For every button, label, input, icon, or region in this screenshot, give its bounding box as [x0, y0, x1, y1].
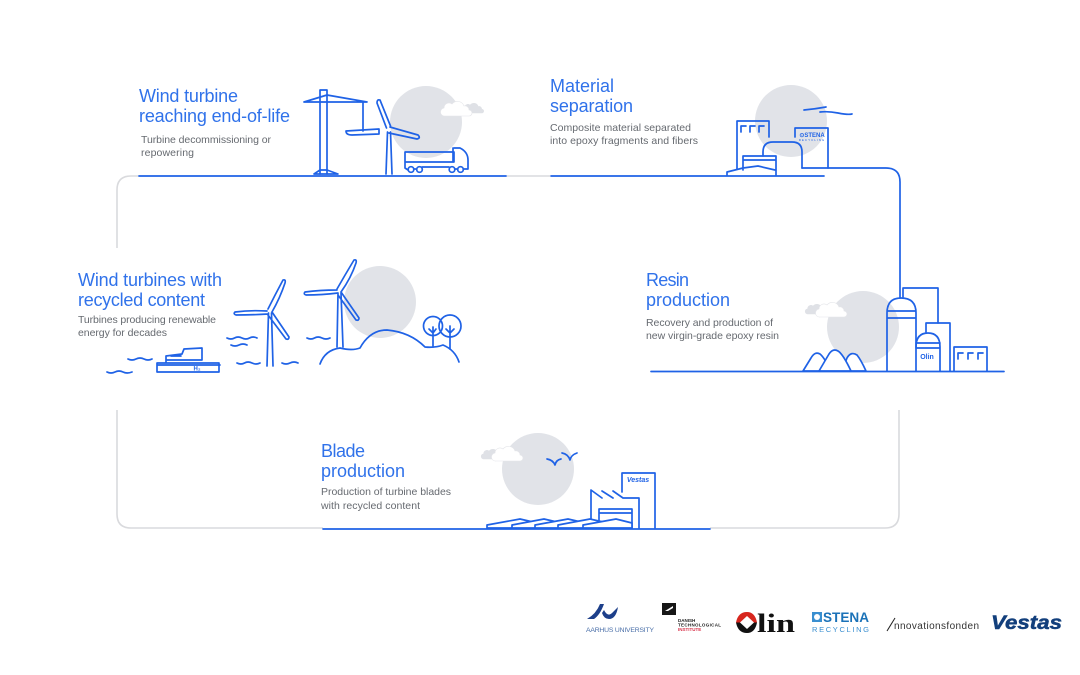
description — [550, 122, 698, 147]
logo: Danish Technological Institute: INSTITUTE — [678, 627, 701, 632]
icon: left building — [737, 121, 769, 169]
heading: Wind turbine — [139, 86, 238, 106]
logo: Danish Technological Institute: TECHNOLOGICAL — [678, 622, 721, 628]
heading: production — [321, 461, 405, 481]
description: new virgin-grade epoxy resin — [646, 330, 779, 342]
description — [141, 134, 272, 159]
description: Composite material separated — [550, 122, 691, 134]
icon: birds — [547, 453, 577, 465]
ground line — [651, 370, 1004, 372]
heading — [139, 86, 290, 126]
cloud — [481, 446, 523, 461]
heading: Blade — [321, 441, 365, 461]
icon: far turbine — [304, 260, 359, 347]
logo: Stena Recycling — [812, 609, 869, 634]
logo: Aarhus University — [586, 604, 654, 634]
heading: recycled content — [78, 290, 205, 310]
logo: Olin — [736, 609, 796, 638]
icon: hydrogen boat — [157, 348, 220, 372]
heading — [321, 441, 405, 481]
icon: small silo and building: Olin — [920, 354, 934, 361]
logo: Danish Technological Institute — [662, 603, 721, 632]
logo: Vestas: Vestas — [991, 613, 1062, 634]
panel: resin production — [646, 270, 1004, 372]
icon: turbine — [377, 100, 419, 174]
icon: truck — [405, 148, 468, 172]
logo: Stena Recycling: RECYCLING — [812, 625, 869, 634]
description — [78, 314, 216, 339]
icon: hills — [320, 330, 459, 364]
description: energy for decades — [78, 327, 167, 339]
description: Turbines producing renewable — [78, 314, 216, 326]
icon: small silo and building — [916, 323, 950, 371]
panel: material separation — [550, 76, 852, 176]
panel: blade production — [320, 433, 710, 529]
description: with recycled content — [320, 500, 420, 512]
description — [320, 486, 451, 512]
heading: Resin — [646, 270, 689, 290]
icon: Vestas factory — [591, 473, 655, 528]
logo: Danish Technological Institute: DANISH — [678, 618, 695, 623]
icon: hydrogen boat: H₂ — [194, 366, 201, 372]
sun circle — [344, 266, 416, 338]
sun circle — [390, 86, 462, 158]
icon: near turbine — [234, 280, 289, 366]
description — [646, 317, 779, 342]
icon: press and blade — [727, 156, 776, 175]
panel: wind turbines with recycled content — [78, 260, 461, 373]
description: Production of turbine blades — [321, 486, 451, 498]
heading: separation — [550, 96, 633, 116]
panel: wind turbine reaching end-of-life — [139, 86, 506, 176]
heading: reaching end-of-life — [139, 106, 290, 126]
sun circle — [827, 291, 899, 363]
icon: Stena building: RECYCLING — [799, 138, 825, 142]
icon: crane — [304, 90, 379, 174]
description: into epoxy fragments and fibers — [550, 135, 698, 147]
heading — [550, 76, 633, 116]
description: Recovery and production of — [646, 317, 773, 329]
logo: Innovationsfonden: nnovationsfonden — [894, 621, 979, 632]
description: Turbine decommissioning or — [141, 134, 272, 146]
icon: Vestas factory: Vestas — [627, 477, 649, 484]
sun circle — [502, 433, 574, 505]
description: repowering — [141, 147, 194, 159]
ground line — [551, 175, 824, 177]
cloud — [440, 101, 484, 116]
icon: wind waves — [804, 107, 852, 114]
icon: pipe — [763, 142, 802, 168]
logo: Olin: lin — [757, 609, 796, 638]
ground line — [139, 175, 506, 177]
heading — [78, 270, 222, 310]
logo: Stena Recycling: STENA — [823, 609, 869, 625]
logo: Aarhus University: AARHUS UNIVERSITY — [586, 627, 654, 634]
icon: waves — [107, 337, 330, 373]
partner logos — [586, 603, 1062, 638]
heading: Wind turbines with — [78, 270, 222, 290]
icon: material piles — [803, 350, 866, 371]
icon: Stena building: ⊙STENA — [799, 133, 825, 139]
icon: blades — [487, 519, 632, 528]
icon: trees — [424, 315, 461, 349]
icon: tall silo — [887, 288, 938, 371]
sun circle — [755, 85, 827, 157]
ground line — [323, 528, 710, 530]
heading: production — [646, 290, 730, 310]
icon: Stena building — [795, 128, 828, 168]
heading — [646, 270, 730, 310]
icon: box building — [954, 347, 987, 371]
process loop connector — [117, 168, 900, 528]
blue connector line: separation to resin — [802, 168, 900, 298]
heading: Material — [550, 76, 614, 96]
cloud — [805, 302, 847, 317]
